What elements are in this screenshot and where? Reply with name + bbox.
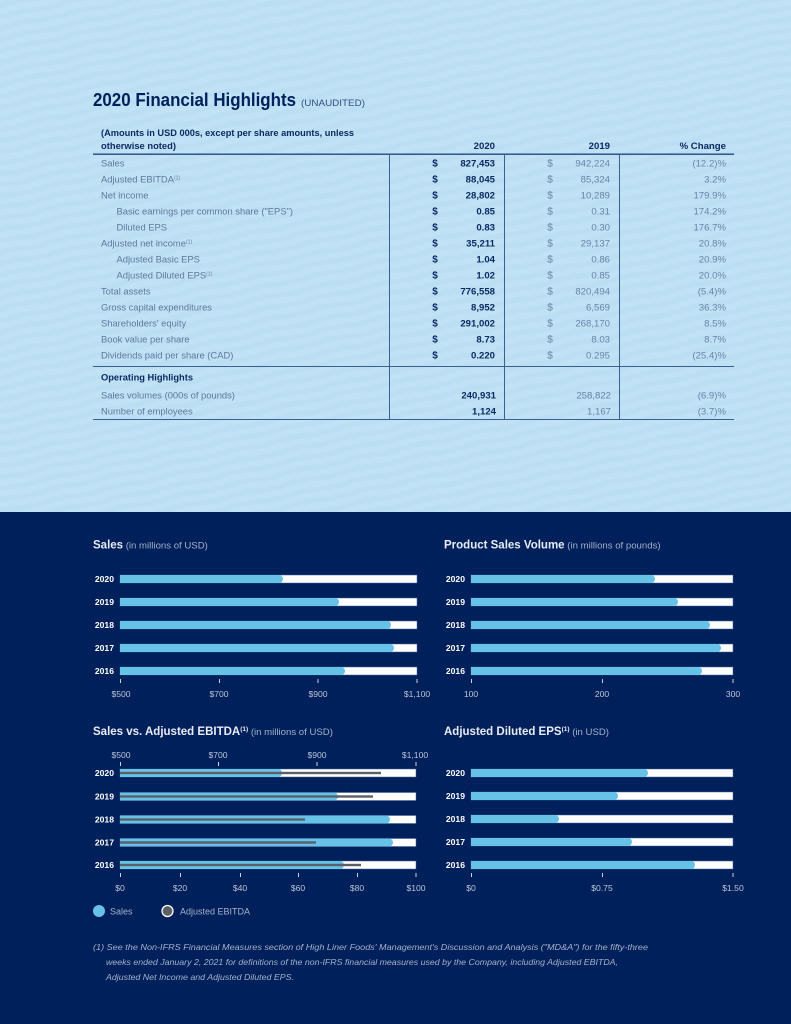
bars: Sales and Adjusted EBITDA: 2018 <box>95 814 114 824</box>
2019 column: 29,137 <box>581 238 610 250</box>
2019 column: 268,170 <box>575 318 610 330</box>
top axis: $1,100 <box>402 750 428 760</box>
2020 column: $ <box>432 270 438 282</box>
bars: Product Sales Volume: 2019 <box>446 597 465 607</box>
percent change column: 20.0% <box>699 270 726 282</box>
2020 column: 28,802 <box>466 190 495 202</box>
bottom axis: $0 <box>115 883 125 893</box>
percent change column: 3.2% <box>704 174 726 186</box>
2019 column: 8.03 <box>591 334 610 346</box>
2019 column: $ <box>547 318 553 330</box>
axis: Product Sales Volume: 200 <box>595 689 609 699</box>
bars: Sales and Adjusted EBITDA: 2016 <box>95 860 114 870</box>
bars: Adjusted Diluted EPS: 2016 <box>446 860 465 870</box>
2020 column: 1,124 <box>472 406 497 418</box>
2019 column: 0.31 <box>591 206 610 218</box>
percent change column: 8.7% <box>704 334 726 346</box>
2020 column: 0.85 <box>476 206 496 218</box>
2019 column: 942,224 <box>575 158 611 170</box>
top axis: $700 <box>208 750 228 760</box>
2020 column: 291,002 <box>460 318 495 330</box>
background: navy panel <box>0 512 791 1024</box>
2019 column: 1,167 <box>587 406 611 418</box>
bars: Sales and Adjusted EBITDA <box>95 768 416 870</box>
axis: Sales: $1,100 <box>404 689 430 699</box>
2020 column: $ <box>432 222 438 234</box>
heading: Adjusted Diluted EPS: Adjusted Diluted EPS <box>444 726 562 738</box>
footnote: weeks ended January 2, 2021 for definitions of the non-IFRS financial measures used by the Company, including Adjusted EBITDA, <box>106 958 618 967</box>
2020 column: 1.04 <box>476 254 496 266</box>
bottom axis: $40 <box>233 883 247 893</box>
2020 column: $ <box>432 334 438 346</box>
bottom axis: $100 <box>406 883 426 893</box>
2020 column: 240,931 <box>461 390 497 402</box>
2019 column: $ <box>547 334 553 346</box>
row labels: Shareholders' equity <box>101 318 186 328</box>
row labels: Gross capital expenditures <box>101 302 212 312</box>
heading: Adjusted Diluted EPS: (in USD) <box>570 727 609 738</box>
2019 column: 10,289 <box>581 190 610 202</box>
bars: Product Sales Volume: 2018 <box>446 620 465 630</box>
top axis <box>111 750 428 766</box>
bars: Sales: 2019 <box>95 597 114 607</box>
legend: Adjusted EBITDA <box>180 906 250 916</box>
bars: Product Sales Volume: 2017 <box>446 643 465 653</box>
row labels: Basic earnings per common share ("EPS") <box>116 206 293 216</box>
2019 column: $ <box>547 222 553 234</box>
chart: Sales vs. Adjusted EBITDA <box>93 726 428 917</box>
row labels: Dividends paid per share (CAD) <box>101 350 233 360</box>
footnote: (1) See the Non-IFRS Financial Measures section of High Liner Foods' Management's Discussion and Analysis ("MD&A") for the fifty-three <box>93 943 648 952</box>
top axis: $500 <box>111 750 131 760</box>
bars: Product Sales Volume <box>446 574 733 676</box>
bars: Sales <box>95 574 417 676</box>
bottom axis: $80 <box>350 883 364 893</box>
row labels: Net income <box>101 190 148 200</box>
axis: Sales: $500 <box>111 689 131 699</box>
2020 column: 0.83 <box>476 222 495 234</box>
bars: Sales: 2016 <box>95 666 114 676</box>
bars: Sales: 2020 <box>95 574 114 584</box>
row labels <box>101 158 293 416</box>
2019 column: $ <box>547 158 553 170</box>
percent change column: 20.9% <box>699 254 726 266</box>
chart: Sales <box>93 540 430 699</box>
background: light blue wave panel <box>0 0 791 512</box>
2019 column: $ <box>547 302 553 314</box>
bars: Adjusted Diluted EPS <box>446 768 733 870</box>
top axis: $900 <box>307 750 327 760</box>
axis: Product Sales Volume: 300 <box>726 689 740 699</box>
table header: 2020 <box>474 141 495 152</box>
2019 column: 0.85 <box>591 270 610 282</box>
chart: Product Sales Volume <box>444 540 740 699</box>
row labels: Adjusted EBITDA <box>101 174 174 184</box>
2020 column: $ <box>432 174 438 186</box>
bars: Sales and Adjusted EBITDA: 2017 <box>95 838 114 848</box>
percent change column: 20.8% <box>699 238 726 250</box>
2020 column: $ <box>432 238 438 250</box>
chart: Adjusted Diluted EPS <box>444 726 744 893</box>
2020 column: 35,211 <box>466 238 496 250</box>
table header: (Amounts in USD 000s, except per share amounts, unless <box>101 128 354 139</box>
percent change column: (3.7)% <box>698 406 726 418</box>
2019 column: $ <box>547 254 553 266</box>
axis: Adjusted Diluted EPS: $0 <box>466 883 476 893</box>
title: (UNAUDITED) <box>301 98 365 108</box>
2019 column: 85,324 <box>581 174 611 186</box>
bars: Product Sales Volume: 2020 <box>446 574 465 584</box>
bottom axis <box>115 873 426 893</box>
bars: Adjusted Diluted EPS: 2020 <box>446 768 465 778</box>
2020 column: $ <box>432 302 438 314</box>
row labels: Operating Highlights <box>101 372 193 384</box>
2019 column: 258,822 <box>576 390 611 402</box>
2020 column: 0.220 <box>471 350 495 362</box>
percent change column: 179.9% <box>693 190 726 202</box>
table header <box>101 128 726 152</box>
heading: Sales vs. Adjusted EBITDA: Sales vs. Adjusted EBITDA <box>93 726 240 738</box>
percent change column: 36.3% <box>699 302 726 314</box>
2020 column: $ <box>432 254 438 266</box>
2020 column: $ <box>432 190 438 202</box>
2020 column: 1.02 <box>476 270 495 282</box>
axis: Product Sales Volume <box>464 679 740 699</box>
table rules <box>93 154 734 420</box>
2019 column: $ <box>547 206 553 218</box>
percent change column: 174.2% <box>693 206 726 218</box>
row labels: (1) <box>174 176 180 182</box>
row labels: (1) <box>186 240 192 246</box>
heading: Product Sales Volume: Product Sales Volume (in millions of pounds) <box>444 540 661 552</box>
2019 column: 6,569 <box>586 302 610 314</box>
bars: Sales and Adjusted EBITDA: 2020 <box>95 768 114 778</box>
bars: Sales: 2017 <box>95 643 114 653</box>
heading: Sales: Sales (in millions of USD) <box>93 540 208 552</box>
table header: 2019 <box>589 141 610 152</box>
axis: Product Sales Volume: 100 <box>464 689 478 699</box>
axis: Adjusted Diluted EPS: $0.75 <box>591 883 613 893</box>
2020 column: 8.73 <box>476 334 495 346</box>
axis: Adjusted Diluted EPS <box>466 873 744 893</box>
bars: Sales and Adjusted EBITDA: 2019 <box>95 792 114 802</box>
bars: Product Sales Volume: 2016 <box>446 666 465 676</box>
row labels: Book value per share <box>101 334 190 344</box>
bars: Adjusted Diluted EPS: 2018 <box>446 814 465 824</box>
table header: % Change <box>680 141 726 152</box>
2019 column: $ <box>547 286 553 298</box>
percent change column: (5.4)% <box>698 286 726 298</box>
2020 column: 776,558 <box>460 286 496 298</box>
2020 column: 8,952 <box>471 302 495 314</box>
2020 column: $ <box>432 158 438 170</box>
2020 column: $ <box>432 286 438 298</box>
axis: Sales: $700 <box>209 689 229 699</box>
percent change column: 176.7% <box>693 222 726 234</box>
2020 column: 88,045 <box>466 174 496 186</box>
2019 column: $ <box>547 238 553 250</box>
legend <box>93 905 250 917</box>
heading: Sales vs. Adjusted EBITDA: (in millions of USD) <box>248 727 333 738</box>
percent change column: (6.9)% <box>698 390 726 402</box>
percent change column: (12.2)% <box>692 158 726 170</box>
2020 column: $ <box>432 206 438 218</box>
row labels: Adjusted net income <box>101 238 186 248</box>
row labels: Adjusted Basic EPS <box>116 254 200 264</box>
percent change column: 8.5% <box>704 318 726 330</box>
row labels: Sales <box>101 158 125 168</box>
percent change column: (25.4)% <box>692 350 726 362</box>
bottom axis: $20 <box>173 883 187 893</box>
row labels: Diluted EPS <box>116 222 167 232</box>
2019 column <box>547 158 611 418</box>
heading: Sales vs. Adjusted EBITDA: (1) <box>240 726 248 733</box>
2019 column: $ <box>547 190 553 202</box>
table header: otherwise noted) <box>101 141 176 152</box>
row labels: (1) <box>206 272 213 278</box>
2020 column: $ <box>432 350 438 362</box>
row labels: Sales volumes (000s of pounds) <box>101 390 235 400</box>
bars: Adjusted Diluted EPS: 2017 <box>446 837 465 847</box>
2019 column: $ <box>547 270 553 282</box>
2019 column: $ <box>547 174 553 186</box>
2019 column: 0.86 <box>591 254 610 266</box>
2019 column: 0.295 <box>586 350 610 362</box>
title: 2020 Financial Highlights <box>93 89 296 110</box>
axis: Sales <box>111 679 430 699</box>
footnote <box>93 943 648 982</box>
legend: Sales <box>110 906 133 916</box>
bottom axis: $60 <box>291 883 305 893</box>
2020 column: $ <box>432 318 438 330</box>
bars: Sales: 2018 <box>95 620 114 630</box>
2020 column: 827,453 <box>460 158 495 170</box>
2019 column: 820,494 <box>575 286 611 298</box>
footnote: Adjusted Net Income and Adjusted Diluted EPS. <box>105 973 294 982</box>
heading: Adjusted Diluted EPS: (1) <box>562 726 570 733</box>
financial highlights table <box>93 128 734 420</box>
axis: Adjusted Diluted EPS: $1.50 <box>722 883 744 893</box>
2019 column: 0.30 <box>591 222 610 234</box>
row labels: Adjusted Diluted EPS <box>116 270 206 280</box>
percent change column <box>692 158 726 418</box>
bars: Adjusted Diluted EPS: 2019 <box>446 791 465 801</box>
axis: Sales: $900 <box>308 689 328 699</box>
2020 column <box>432 158 497 418</box>
row labels: Total assets <box>101 286 151 296</box>
row labels: Number of employees <box>101 406 193 416</box>
2019 column: $ <box>547 350 553 362</box>
